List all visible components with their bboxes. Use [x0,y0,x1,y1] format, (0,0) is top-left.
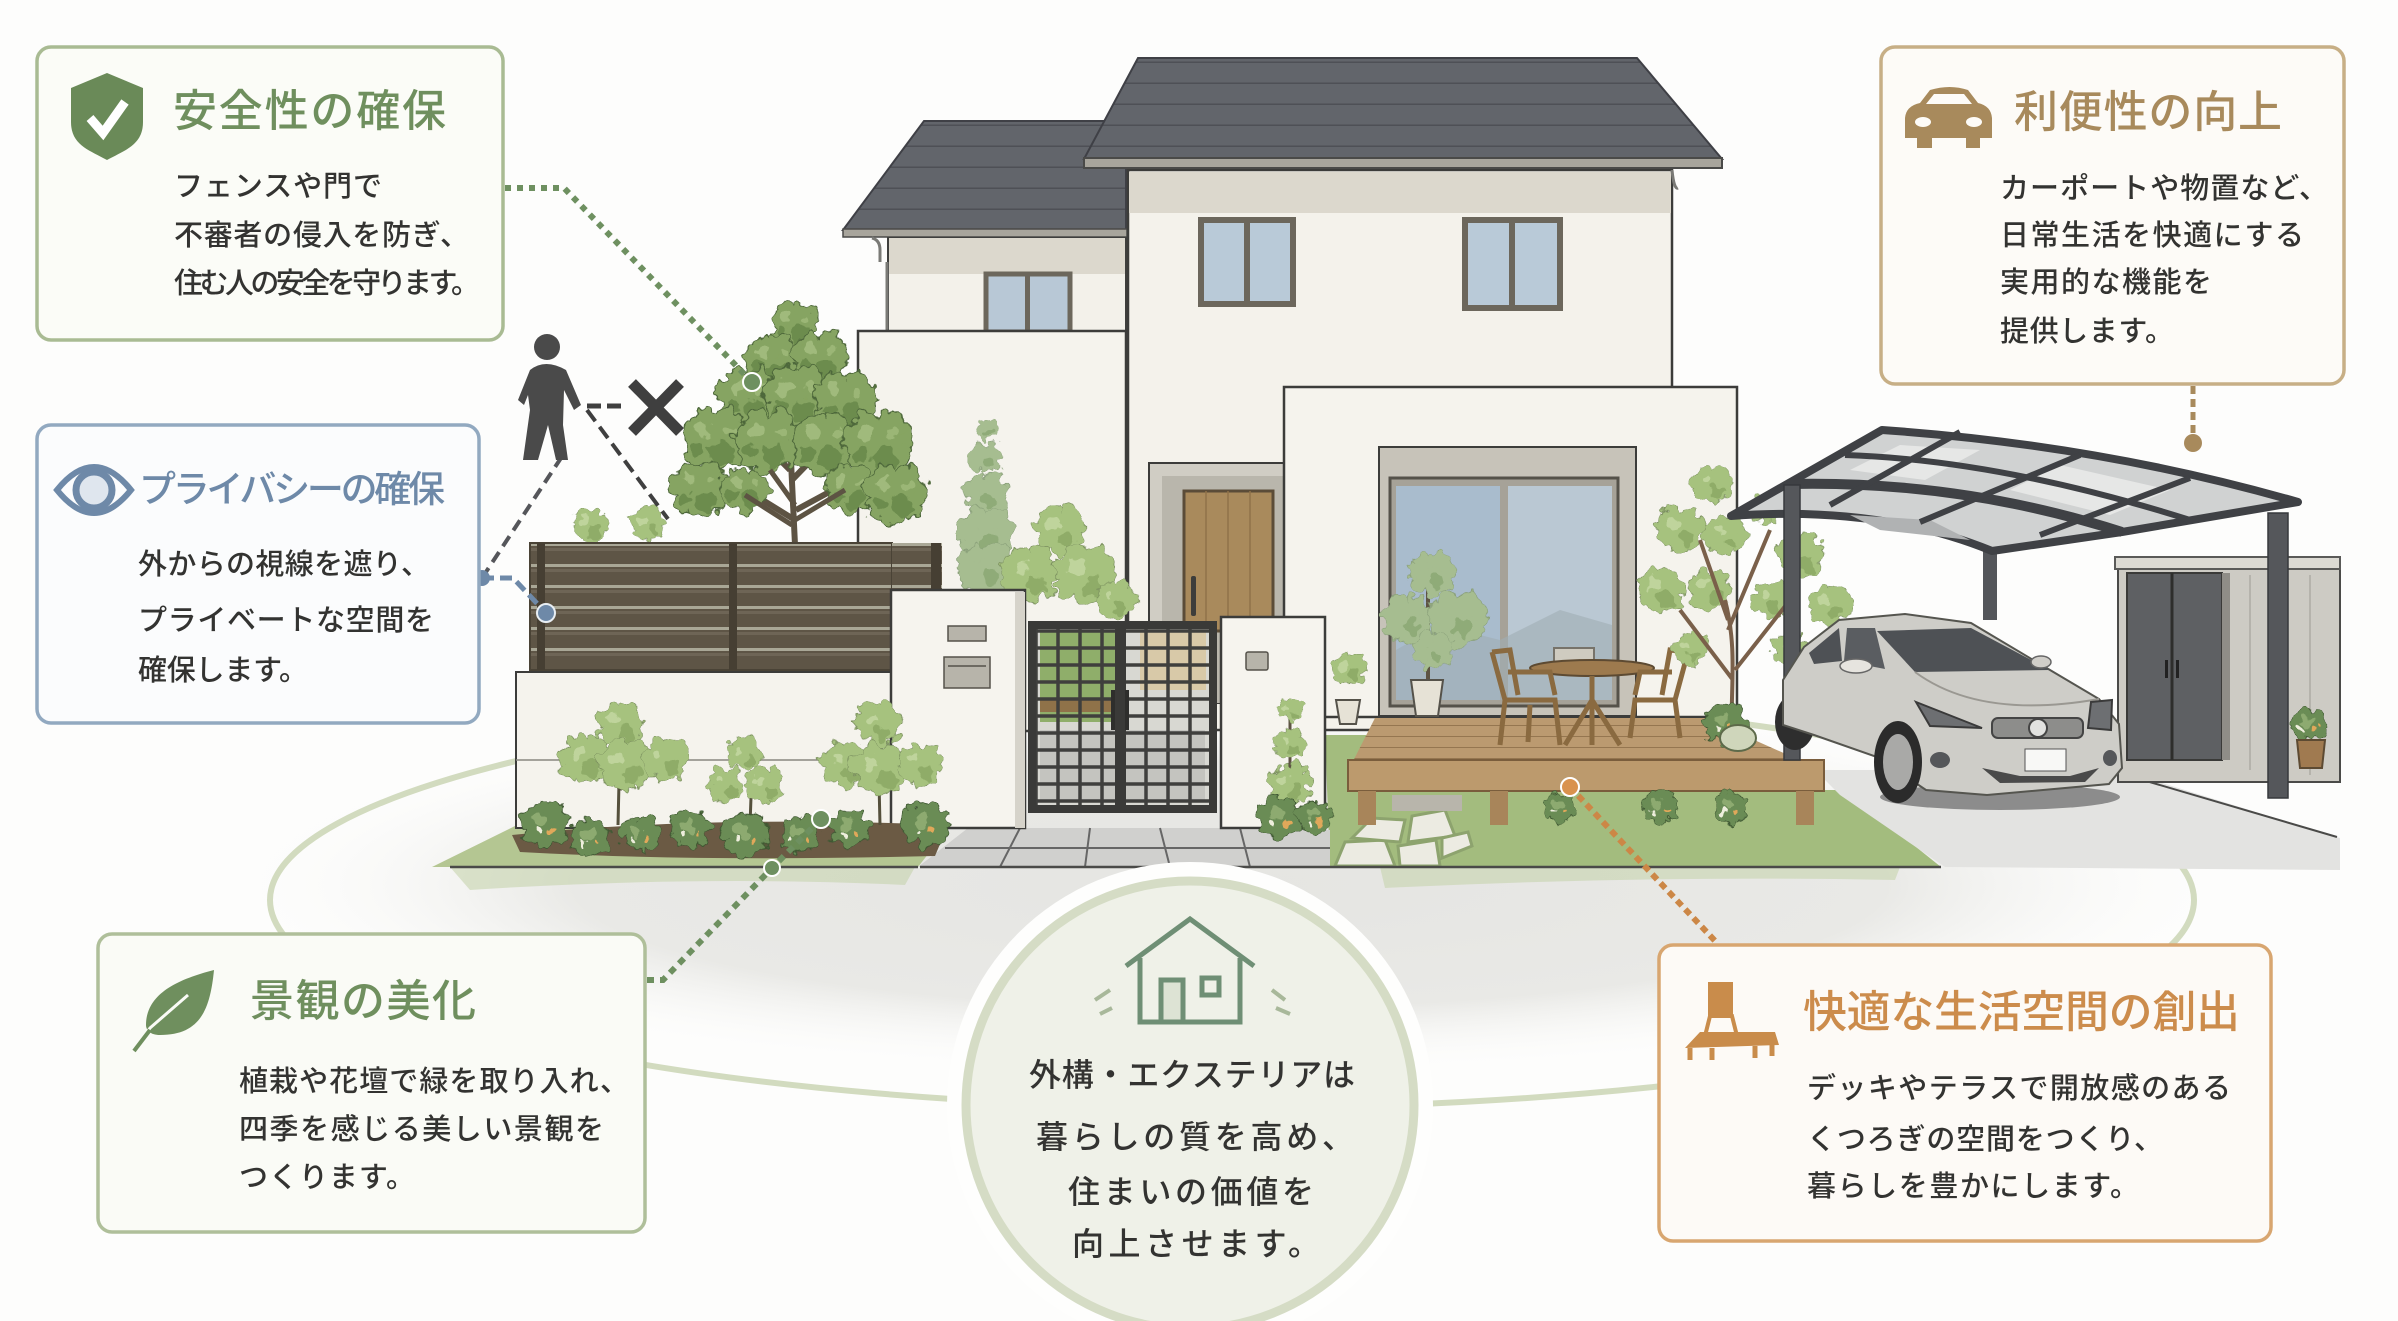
message text: 外構・エクステリアは [1029,1057,1355,1093]
connector: safety to fence [505,188,761,391]
icon: house [1095,919,1290,1022]
panel: privacy: プライベートな空間を [138,604,434,637]
car [1775,614,2122,810]
heading: 快適な生活空間の創出 [1803,988,2240,1037]
connector: convenience to carport [2184,386,2202,452]
upper left roof [843,121,1127,237]
panel: comfort: くつろぎの空間をつくり、 [1807,1123,2163,1156]
privacy fence [530,543,942,670]
storage shed [2115,557,2340,782]
balcony wall [858,331,1126,731]
small pot by shed [2292,708,2328,768]
panel: convenience: 日常生活を快適にする [2000,219,2304,252]
left gate pillar [891,590,1025,828]
panel: landscape [98,934,645,1232]
icon: eye [57,467,131,513]
panel: privacy [37,425,479,723]
heading: 安全性の確保 [173,87,446,136]
low shrubs behind the fence [572,508,666,542]
central message: 住まいの価値を [1068,1174,1314,1210]
central message: 暮らしの質を高め、 [1036,1119,1354,1155]
panel: safety [37,47,503,340]
panel: convenience: 実用的な機能を [2000,266,2212,299]
central message [947,862,1433,1321]
upper left wall with window [872,238,1126,333]
panel: safety: 住む人の安全を守ります。 [174,267,480,300]
panel: landscape: 四季を感じる美しい景観を [239,1113,604,1146]
paving and stepping stones [450,810,1941,867]
body text: カーポートや物置など、 [2000,172,2328,205]
lawn and driveway [432,735,2340,890]
main roof [1084,58,1722,188]
connector: landscape to planting [647,810,830,980]
wood deck [1348,718,1824,825]
privacy sight lines [474,406,668,622]
carport [1731,430,2298,798]
large window [1379,447,1636,716]
right tree [1636,466,1852,751]
body text: 植栽や花壇で緑を取り入れ、 [239,1065,629,1098]
icon: shield [71,73,143,160]
panel: comfort: 暮らしを豊かにします。 [1807,1170,2139,1203]
heading: プライバシーの確保 [139,469,445,510]
icon: leaf [134,970,214,1051]
panel: privacy: 確保します。 [138,654,308,687]
panel: landscape: つくります。 [239,1162,415,1194]
ring connecting the cards [270,692,2194,1108]
big tree [670,302,927,545]
panel: safety: 不審者の侵入を防ぎ、 [174,219,469,252]
patio furniture [1492,648,1688,745]
icon: intruder silhouette [518,334,581,460]
right gate pillar [1221,617,1325,828]
heading: 景観の美化 [250,977,476,1026]
heading: 利便性の向上 [2014,88,2282,137]
conifer and bushes [957,420,1135,618]
planting bed [512,703,949,858]
main wall [1128,170,1672,730]
body text: 外からの視線を遮り、 [138,548,430,581]
panel: comfort [1659,945,2271,1241]
panel: convenience [1881,47,2344,384]
central message: 向上させます。 [1072,1226,1320,1262]
entrance and door [1149,463,1284,703]
ground shadow [220,695,2240,1075]
body text: フェンスや門で [174,171,382,203]
potted plants [1331,553,1488,724]
entry gate [1029,622,1216,812]
illustration: house and exterior [432,58,2340,890]
front volume [1284,387,1737,717]
connector: comfort to deck [1561,778,1717,943]
icon: deck chair [1685,982,1779,1060]
shrub at right pillar [1258,699,1333,838]
panel: convenience: 提供します。 [2000,315,2174,348]
upper windows [1201,220,1560,308]
low wall [516,672,892,828]
body text: デッキやテラスで開放感のある [1807,1072,2231,1105]
icon: cross mark [632,383,680,432]
icon: car [1905,87,1992,148]
